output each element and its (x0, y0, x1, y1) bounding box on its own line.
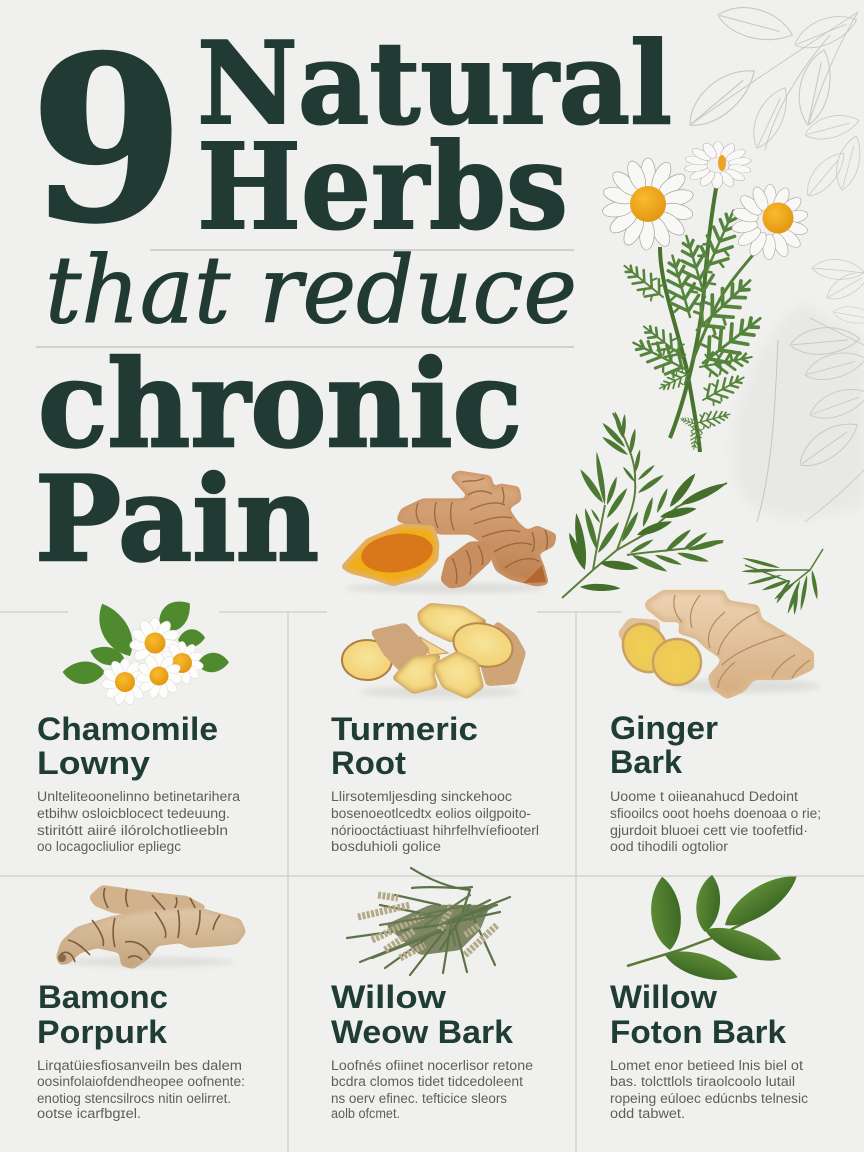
body text: Unlteliteoonelinno betinetarihera (37, 789, 241, 804)
illustration: small herb sprig (741, 549, 823, 615)
body text: bas. tolcttlols tiraolcoolo lutail (610, 1074, 795, 1089)
body text: Lomet enor betieed lnis biel ot (610, 1058, 803, 1073)
body text: oo locagocliulior epliegc (37, 839, 181, 854)
body text: bosduhioli golice (331, 839, 441, 854)
title line: that reduce: that reduce (45, 236, 577, 344)
heading: Willow (331, 979, 446, 1015)
body text: aolb ofcmet. (331, 1106, 400, 1121)
heading: Bamonc (38, 979, 168, 1015)
body text (610, 789, 821, 854)
heading (610, 710, 718, 780)
body text: bcdra clomos tidet tidcedoleent (331, 1074, 523, 1089)
body text: ood tihodili ogtolior (610, 839, 729, 854)
heading (331, 711, 478, 781)
panel: ginger (610, 592, 821, 854)
body text (37, 1058, 245, 1121)
body text (610, 1058, 808, 1121)
heading: Turmeric (331, 711, 478, 747)
icon: ginger root (57, 886, 245, 968)
body text (331, 1058, 533, 1121)
flower: large daisy (601, 158, 695, 250)
body text: bosenoeotlcedtx eolios oilgpoito- (331, 806, 531, 821)
body text: ropeing eúloec edúcnbs telnesic (610, 1091, 808, 1106)
heading (610, 979, 786, 1050)
body text: Lirqatüiesfiosanveiln bes dalem (37, 1058, 242, 1073)
body text: enotiog stencsilrocs nitin oelirret. (37, 1091, 231, 1106)
illustration: chamomile plant (601, 142, 809, 452)
panel: chamomile (37, 593, 241, 854)
heading: Porpurk (37, 1014, 167, 1050)
heading: Root (331, 745, 406, 781)
flower: top daisy (684, 142, 752, 189)
icon: green leaves (627, 865, 804, 988)
body text: ootse icarfbgɪel. (37, 1106, 141, 1121)
numeral 9: 9 (30, 8, 184, 273)
heading: Willow (610, 979, 717, 1015)
icon: dried herb bundle (347, 868, 510, 975)
heading: Chamomile (37, 711, 218, 747)
illustration: rosemary sprig (562, 411, 728, 598)
heading: Weow Bark (331, 1014, 513, 1050)
title line: chronic: chronic (38, 334, 522, 475)
panel: turmeric (331, 604, 539, 854)
body text (37, 789, 241, 854)
heading (331, 979, 513, 1050)
body text: ns oerv efinec. tefticice sleors (331, 1091, 507, 1106)
body text: Loofnés ofiinet nocerlisor retone (331, 1058, 533, 1073)
panel: willow foton bark (610, 865, 808, 1121)
body text: etbihw osloicblocect tedeuung. (37, 806, 230, 821)
body text: stiritótt aiiré ilórolchotlieebln (37, 823, 228, 838)
sketch leaves: top right (679, 0, 864, 202)
body text: Llirsotemljesding sinckehooc (331, 789, 512, 804)
heading (37, 711, 218, 781)
body text: Uoome t oiieanahucd Dedoint (610, 789, 798, 804)
body text: gjurdoit bluoei cett vie toofetfid· (610, 823, 808, 838)
title line: Natural: Natural (197, 17, 672, 150)
body text: sfiooilcs ooot hoehs doenoaa o rie; (610, 806, 821, 821)
panel: bamonc (37, 886, 245, 1121)
heading: Bark (610, 744, 682, 780)
flower: right daisy (731, 184, 809, 260)
panel: willow weow bark (331, 868, 533, 1121)
icon: chamomile bunch (63, 593, 229, 706)
body text: odd tabwet. (610, 1106, 685, 1121)
body text (331, 789, 539, 854)
body text: oosinfolaiofdendheopee oofnente: (37, 1074, 245, 1089)
title line: Pain: Pain (35, 450, 319, 588)
powder bowl (342, 525, 438, 585)
body text: nóriooctáctiuast hihrfelhvíefiooterl (331, 823, 539, 838)
title (30, 8, 672, 588)
illustration: turmeric root with powder bowl (342, 472, 555, 593)
icon: turmeric slices (342, 604, 525, 698)
heading: Lowny (37, 745, 150, 781)
heading: Foton Bark (610, 1014, 786, 1050)
heading: Ginger (610, 710, 718, 746)
icon: ginger root with slices (614, 592, 820, 697)
sketch leaves: right side with pale blob (732, 257, 864, 522)
heading (37, 979, 168, 1050)
title line: Herbs: Herbs (197, 117, 568, 256)
